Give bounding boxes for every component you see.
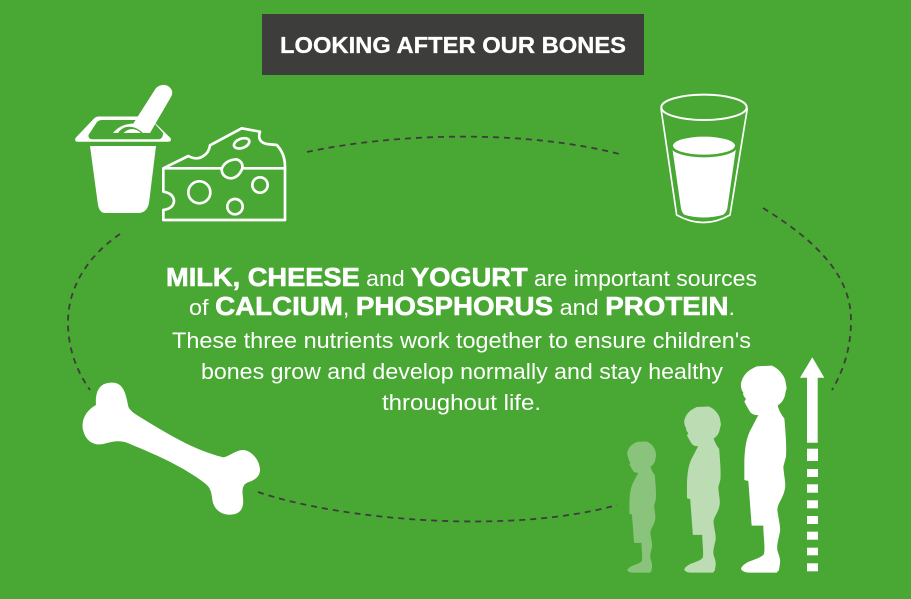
- body text: of CALCIUM , PHOSPHORUS and PROTEIN .: [189, 291, 735, 321]
- medium child silhouette: [684, 406, 721, 573]
- small child silhouette: [627, 441, 656, 573]
- growth arrow: [800, 357, 824, 571]
- body text: MILK, CHEESE and YOGURT are important sources: [166, 262, 757, 292]
- title: [262, 14, 644, 75]
- large child silhouette: [741, 366, 787, 573]
- dashed cycle ellipse: [68, 137, 851, 521]
- title: LOOKING AFTER OUR BONES: [280, 32, 626, 58]
- icon: yogurt pot: [75, 85, 172, 213]
- body text: These three nutrients work together to ensure children's: [172, 328, 751, 353]
- icon: bone: [83, 383, 260, 515]
- icon: cheese wedge: [163, 128, 285, 220]
- body text: throughout life.: [382, 390, 541, 415]
- icon: glass of milk: [661, 95, 747, 222]
- body text: [166, 262, 757, 415]
- body text: bones grow and develop normally and stay healthy: [201, 359, 723, 384]
